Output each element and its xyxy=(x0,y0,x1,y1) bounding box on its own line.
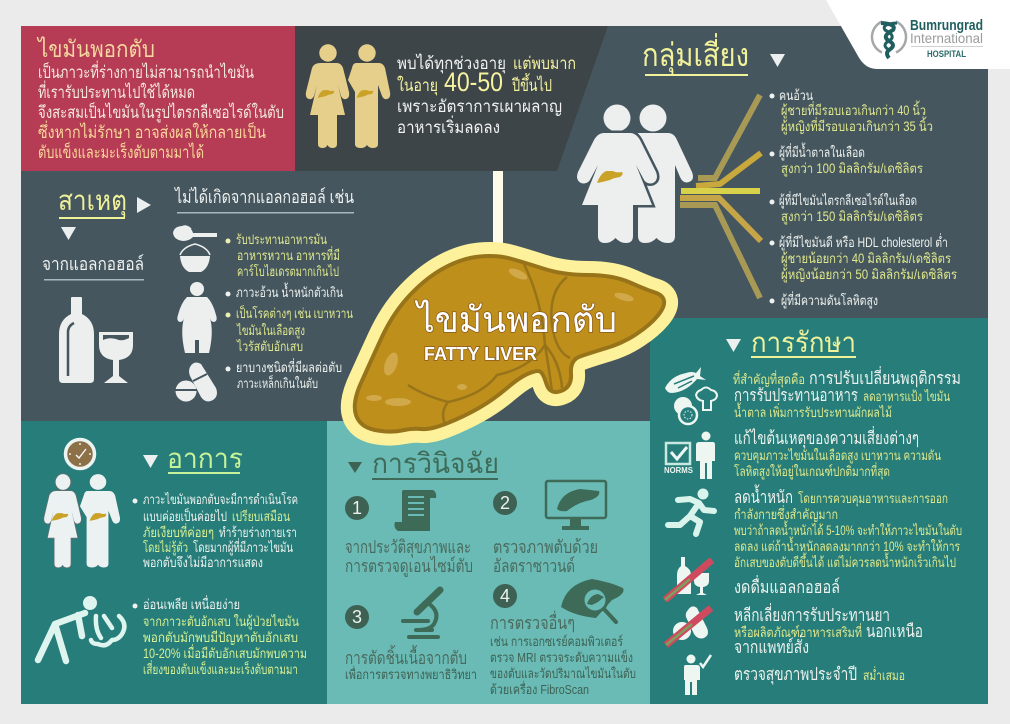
text: treatment three: ลดน้ำหนัก xyxy=(734,484,793,507)
icon: monitor with liver xyxy=(546,481,606,530)
text: step three: การตัดชิ้นเนื้อจากตับ xyxy=(345,645,467,668)
icon: caduceus xyxy=(872,22,906,58)
text: treatment six: ตรวจสุขภาพประจำปี xyxy=(734,664,857,685)
text block: definition: จึงสะสมเป็นไขมันในรูปไตรกลีเซอไรด์ในตับ xyxy=(38,101,284,123)
text: International: International xyxy=(910,30,983,46)
text block: definition: เป็นภาวะที่ร่างกายไม่สามารถนำไขมัน xyxy=(38,60,254,82)
text block: cause list: ไขมันในเลือดสูง xyxy=(236,322,305,339)
text: step four: ด้วยเครื่อง FibroScan xyxy=(490,681,589,697)
heading: risk groups: กลุ่มเสี่ยง xyxy=(642,33,749,75)
text: step three xyxy=(345,645,477,682)
text block: age: เพราะอัตราการเผาผลาญ xyxy=(397,97,562,116)
connector bar xyxy=(493,171,503,246)
text: step four: การตรวจอื่นๆ xyxy=(490,610,575,633)
text: treatment one: การรับประทานอาหาร xyxy=(734,385,858,405)
text block: risk list: ผู้หญิงน้อยกว่า 50 มิลลิกรัม/เดซิลิตร xyxy=(781,267,957,283)
panel: risk groups xyxy=(577,33,957,309)
text block: symptom two xyxy=(132,595,307,677)
text: treatment five: จากแพทย์สั่ง xyxy=(734,635,809,657)
text: treatment two xyxy=(734,426,941,480)
liver xyxy=(355,256,664,432)
icon: arrow down xyxy=(61,227,76,240)
text block: cause list: ภาวะเหล็กเกินในตับ xyxy=(237,374,318,391)
icon: arrow right xyxy=(137,197,151,213)
text block: symptom two: พอกตับมักพบมีปัญหาตับอักเสบ xyxy=(143,630,298,645)
text block: cause list: ยาบางชนิดที่มีผลต่อตับ xyxy=(236,358,342,375)
text: treatment two: โลหิตสูงให้อยู่ในเกณฑ์ปกติมากที่สุด xyxy=(734,462,890,480)
icon: no medicine xyxy=(666,606,711,645)
badge numbers: 4 xyxy=(500,586,510,606)
liver highlights xyxy=(366,266,635,406)
icon: person with check xyxy=(684,654,711,695)
icon: couple xyxy=(44,474,120,568)
text block: cause list: คาร์โบไฮเดรตมากเกินไป xyxy=(237,263,339,279)
icon: pills xyxy=(175,363,217,402)
text block: risk list: ผู้ที่มีน้ำตาลในเลือด xyxy=(779,142,865,161)
icon: norms check and person xyxy=(664,432,715,479)
heading: definition: ไขมันพอกตับ xyxy=(36,36,155,62)
text block: cause list: ไวรัสตับอักเสบ xyxy=(236,339,303,354)
text block: age: อาหารเริ่มลดลง xyxy=(397,115,500,137)
text: step four xyxy=(490,610,636,697)
text block: risk list: สูงกว่า 150 มิลลิกรัม/เดซิลิตร xyxy=(781,209,923,225)
icon: norms check and person: NORMS xyxy=(664,466,694,475)
text block: risk list xyxy=(779,88,957,309)
text: step one xyxy=(345,537,473,577)
icon: no alcohol xyxy=(665,557,712,600)
heading: causes: สาเหตุ xyxy=(58,185,127,218)
icon: scroll xyxy=(394,490,436,531)
subheading: alcohol: จากแอลกอฮอล์ xyxy=(42,254,144,274)
text: step four: ตรวจ MRI ตรวจระดับความแข็ง xyxy=(490,648,633,665)
text block: definition xyxy=(38,60,284,162)
text block: risk list: ผู้ที่มีไขมันดี หรือ HDL cholesterol ต่ำ xyxy=(779,233,948,251)
text block: symptom one: ภาวะไขมันพอกตับจะมีการดำเนินโรค xyxy=(143,491,298,507)
text block: risk list: สูงกว่า 100 มิลลิกรัม/เดซิลิตร xyxy=(781,161,923,177)
panel: age xyxy=(295,26,608,171)
text block: cause list: อาหารหวาน อาหารที่มี xyxy=(237,246,340,263)
text block: age: 40-50 xyxy=(444,67,503,97)
text: treatment two: แก้ไขต้นเหตุของความเสี่ยงต่างๆ xyxy=(734,426,919,449)
icon: liver under magnifier xyxy=(561,579,624,622)
text block: risk list: ผู้ชายที่มีรอบเอวเกินกว่า 40 นิ้ว xyxy=(781,100,926,119)
text: treatment three: โดยการควบคุมอาหารและการออก xyxy=(798,490,948,507)
text block: risk list: คนอ้วน xyxy=(779,88,813,103)
subheading: alcohol xyxy=(42,254,144,280)
text: treatment one: ที่สำคัญที่สุดคือ xyxy=(733,370,805,388)
text: Bumrungrad: Bumrungrad xyxy=(910,17,983,34)
text block: age xyxy=(397,53,576,137)
icon: clock xyxy=(66,440,94,468)
bullets xyxy=(770,94,774,304)
text block: symptom one: พอกตับจึงไม่มีอาการแสดง xyxy=(143,555,263,570)
text block: risk list: ผู้ที่มีความดันโลหิตสูง xyxy=(781,291,878,309)
panel: symptoms xyxy=(21,421,327,704)
text block: symptom one: เปรียบเสมือน xyxy=(232,509,290,524)
text: treatment one: น้ำตาล เพิ่มการรับประทานผักผลไม้ xyxy=(734,402,892,420)
text block: age: แต่พบมาก xyxy=(513,54,576,73)
text: step two: ตรวจภาพตับด้วย xyxy=(493,537,598,557)
badge numbers: 2 xyxy=(500,493,510,513)
text: treatment six: สม่ำเสมอ xyxy=(863,666,905,683)
icon: spoon and bowl xyxy=(173,226,217,272)
icon: woman and man xyxy=(306,44,390,148)
logo tab xyxy=(826,0,1010,69)
icon: overweight person xyxy=(177,282,217,353)
text: treatment five: นอกเหนือ xyxy=(866,621,923,641)
text block: definition: ตับแข็งและมะเร็งตับตามมาได้ xyxy=(38,141,204,162)
text block: symptom one: โดยมากผู้ที่มีภาวะไขมัน xyxy=(193,538,293,556)
text: step four: ของตับและวัดปริมาณไขมันในตับ xyxy=(490,666,636,681)
heading: treatment: การรักษา xyxy=(751,327,856,358)
text: treatment two: ควบคุมภาวะไขมันในเลือดสูง เบาหวาน ความดัน xyxy=(734,447,941,464)
text block: symptom two: จากภาวะตับอักเสบ ในผู้ป่วยไขมัน xyxy=(143,613,299,630)
text: step two xyxy=(493,537,598,576)
panel: slate background xyxy=(21,26,988,421)
text: treatment one: การปรับเปลี่ยนพฤติกรรม xyxy=(809,366,961,388)
text block: cause list xyxy=(236,232,353,391)
text: step three: เพื่อการตรวจทางพยาธิวิทยา xyxy=(345,666,477,682)
text block: symptom one: แบบค่อยเป็นค่อยไป xyxy=(143,507,227,524)
icon: microscope xyxy=(403,590,440,637)
text: step two: อัลตราซาวนด์ xyxy=(493,556,575,576)
badge numbers xyxy=(352,493,510,627)
text block: symptom two: อ่อนเพลีย เหนื่อยง่าย xyxy=(143,595,240,612)
text block: cause list: เป็นโรคต่างๆ เช่น เบาหวาน xyxy=(236,304,353,321)
heading: diagnosis: การวินิจฉัย xyxy=(372,448,499,479)
panel: diagnosis xyxy=(327,421,650,704)
text: treatment one: ลดอาหารแป้ง ไขมัน xyxy=(863,389,950,404)
text: step one: จากประวัติสุขภาพและ xyxy=(345,537,471,558)
text block: symptom two: เสี่ยงของตับแข็งและมะเร็งตับตามมา xyxy=(143,660,298,677)
text: step four: เช่น การเอกซเรย์คอมพิวเตอร์ xyxy=(490,634,623,649)
text: treatment five xyxy=(734,603,923,657)
text block: symptom one xyxy=(132,491,298,570)
badge numbers: 1 xyxy=(352,498,362,518)
subheading: non-alcohol: ไม่ได้เกิดจากแอลกอฮอล์ เช่น xyxy=(173,186,354,207)
text block: age: ปีขึ้นไป xyxy=(511,73,552,95)
text block: cause list: รับประทานอาหารมัน xyxy=(236,232,327,247)
icon: runner xyxy=(668,488,714,534)
text: treatment three xyxy=(734,484,962,570)
text block: symptom one: ภัยเงียบที่ค่อยๆ xyxy=(143,523,214,540)
text block: risk list: ผู้ที่มีไขมันไตรกลีเซอไรด์ในเลือด xyxy=(779,191,917,209)
text: step one: การตรวจดูเอนไซม์ตับ xyxy=(345,555,473,577)
icon: fish and vegetables xyxy=(665,367,717,424)
text block: risk list: ผู้ชายน้อยกว่า 40 มิลลิกรัม/เดซิลิตร xyxy=(781,251,951,267)
number badges xyxy=(345,491,517,629)
text: treatment five: หลีกเลี่ยงการรับประทานยา xyxy=(734,603,890,625)
text block: cause list: ภาวะอ้วน น้ำหนักตัวเกิน xyxy=(236,282,343,300)
icon: bottle and glass xyxy=(59,297,133,383)
text: treatment five: หรือผลิตภัณฑ์อาหารเสริมที่ xyxy=(734,623,862,640)
liver title: ไขมันพอกตับ xyxy=(414,299,617,340)
icon: fatigued person xyxy=(38,596,124,661)
icon: triangle xyxy=(770,54,785,67)
badge numbers: 3 xyxy=(352,607,362,627)
bullets xyxy=(226,238,230,372)
text block: symptom one: โดยไม่รู้ตัว xyxy=(143,539,188,556)
liver title: FATTY LIVER xyxy=(424,344,537,364)
text block: symptom two: 10-20% เมื่อมีตับอักเสบมักพบความ xyxy=(143,644,307,661)
text: Hospital: HOSPITAL xyxy=(927,49,966,59)
text: treatment three: กำลังกายซึ่งสำคัญมาก xyxy=(734,505,838,522)
text: treatment four: งดดื่มแอลกอฮอล์ xyxy=(734,575,840,597)
text block: definition: ที่เรารับประทานไปใช้ได้หมด xyxy=(38,80,195,102)
text block: age: ในอายุ xyxy=(397,75,438,96)
panel: treatment xyxy=(650,318,988,704)
text: treatment one xyxy=(733,366,961,420)
text block: definition: ซึ่งหากไม่รักษา อาจส่งผลให้กลายเป็น xyxy=(38,120,266,142)
heading: symptoms: อาการ xyxy=(167,443,243,474)
icon: couple with liver xyxy=(577,104,693,243)
liver title xyxy=(414,299,617,364)
panel: causes xyxy=(42,185,354,402)
text block: symptom one: ทำร้ายร่างกายเรา xyxy=(219,525,297,540)
rays xyxy=(680,95,761,298)
text block: age: พบได้ทุกช่วงอายุ xyxy=(397,53,506,74)
text block: risk list: ผู้หญิงที่มีรอบเอวเกินกว่า 35 นิ้ว xyxy=(781,116,933,135)
panel: definition xyxy=(21,26,295,171)
liver lobe lines xyxy=(408,262,570,424)
